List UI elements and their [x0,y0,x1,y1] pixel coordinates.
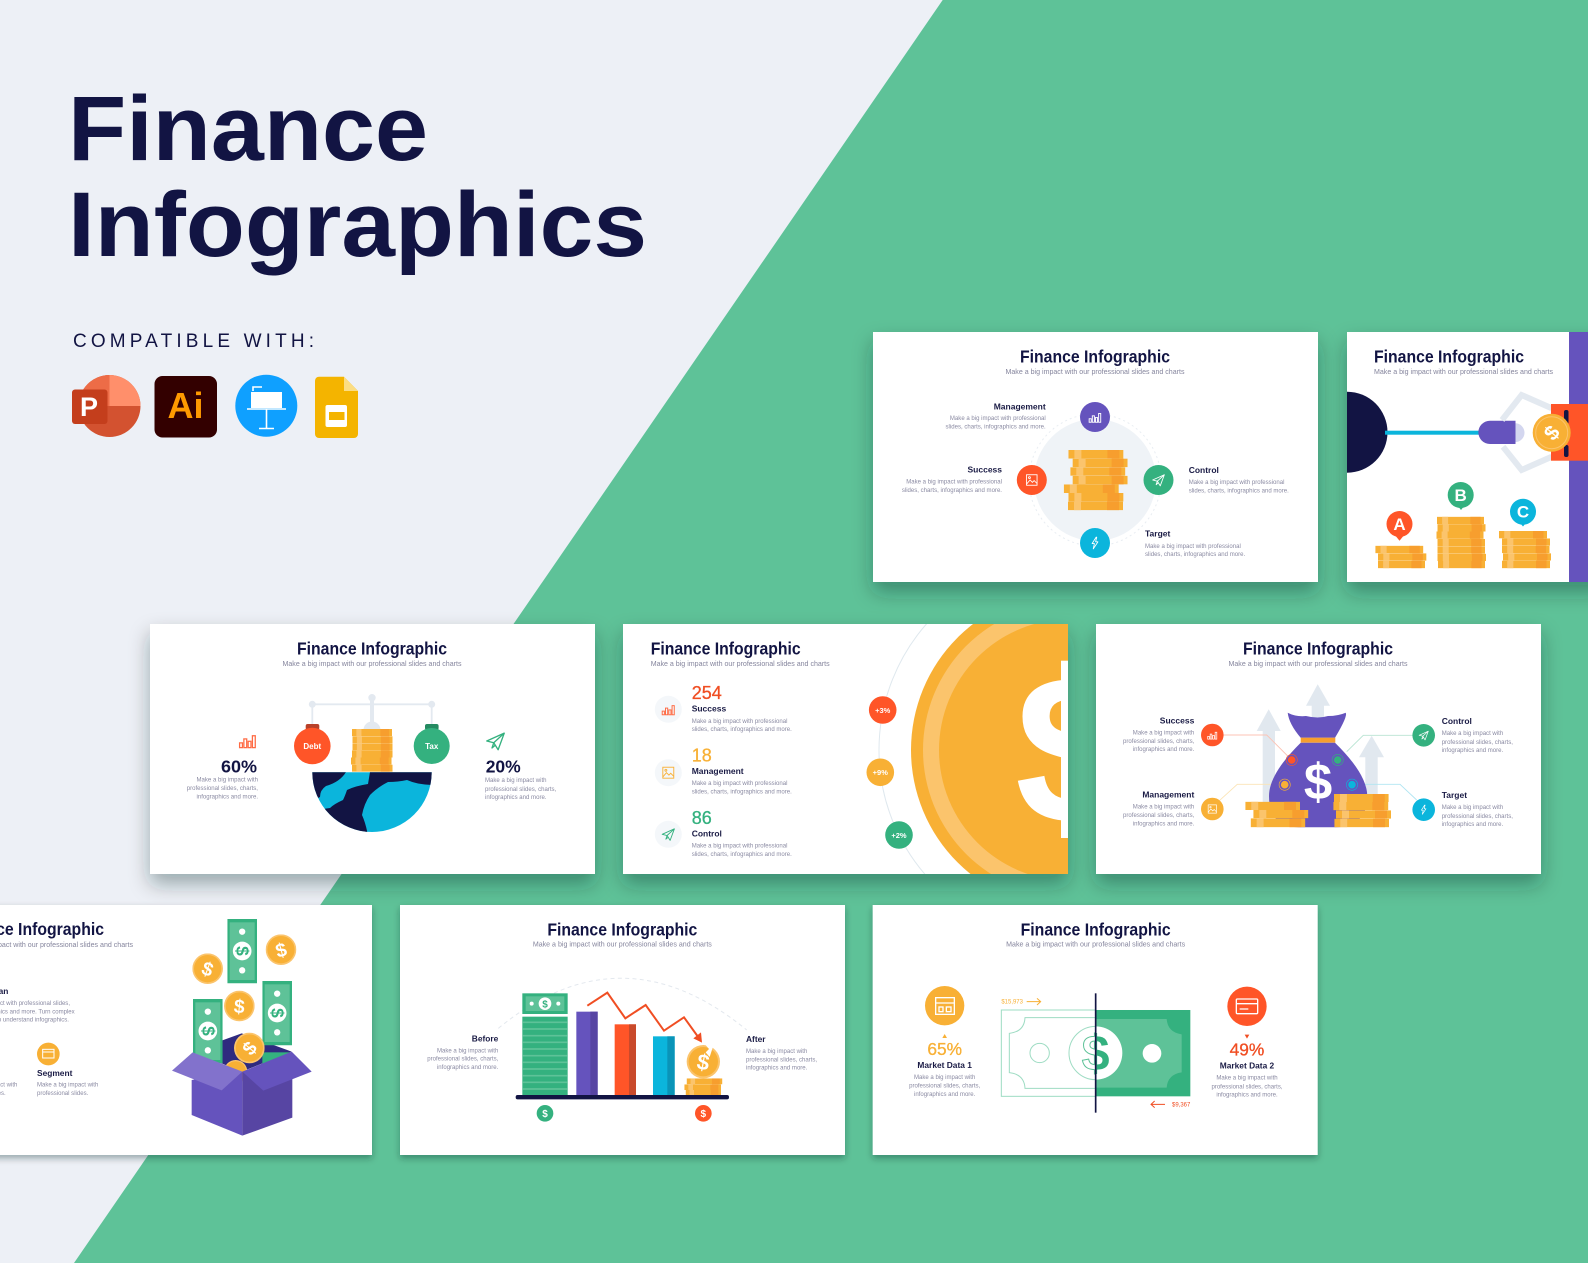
text: success: Make a big impact with [1133,730,1194,736]
icon row: compatible apps [72,375,358,438]
money bag: $ [1304,753,1332,810]
text: target: Target [1442,790,1467,800]
text: management: Make a big impact with [1133,804,1194,810]
text: target: slides, charts, infographics and more. [1145,552,1245,558]
marker: start [537,1105,553,1122]
value: $15,973: $15,973 [1001,1000,1024,1006]
text: 20 percent: 20% [486,757,521,777]
value: $9,367: $9,367 [1172,1102,1191,1108]
pin B [1448,482,1474,510]
text: control [1442,716,1513,754]
text: market data 1: professional slides, charts, [909,1084,981,1090]
icon: PowerPoint [72,375,140,437]
text: control: infographics and more. [1442,748,1504,754]
text: target: Make a big impact with [1442,805,1503,811]
icon: control [1144,465,1174,495]
connector lines [1212,735,1423,801]
badge: +3%: +3% [875,706,891,715]
stat: 18 management: 18 [692,746,712,766]
text: target: Target [1145,529,1171,539]
stat: 86 control: 86 [692,808,712,828]
text: after: professional slides, charts, [746,1057,817,1063]
marker: end [695,1105,712,1122]
icon: card [1227,987,1267,1026]
text: control: professional slides, charts, [1442,740,1513,746]
icon: Keynote [235,375,297,437]
globe half [310,772,435,836]
panel: slide with coin press and A B C stacks [1347,332,1588,582]
text: market data 2: Market Data 2 [1220,1061,1275,1071]
title [68,78,647,276]
heading: Finance Infographic [297,638,447,658]
text: market data 2: infographics and more. [1216,1093,1278,1099]
text: market data 2: professional slides, charts, [1211,1084,1283,1090]
central circle [1029,414,1161,546]
subheading: Make a big impact with our professional slides and charts [1374,367,1553,376]
text: success: infographics and more. [1133,747,1195,753]
text: 60 percent: professional slides, charts, [187,786,258,792]
money box illustration: $ [198,1026,218,1036]
marker: start: $ [542,1109,548,1120]
subheading: Make a big impact with our professional slides and charts [1006,367,1185,376]
text: management [946,401,1046,430]
trend arrow [587,993,702,1043]
heading: Finance Infographic [547,920,698,940]
subheading: Make a big impact with our professional slides and charts [533,940,712,949]
weight: tax [414,724,450,764]
machine illustration [1347,392,1588,473]
text: market data 2: 49% [1230,1040,1264,1060]
icon: success [1017,465,1047,495]
money box illustration: $ [233,997,246,1018]
text: segment: Make a big impact with [37,1083,98,1089]
stack C [1499,531,1551,568]
pin A: A [1393,515,1406,534]
text: control: Make a big impact with [1442,731,1503,737]
icon: bars [240,736,255,748]
coin stack [351,729,393,772]
weight: tax: Tax [425,742,439,751]
money box illustration: $ [268,1008,288,1018]
stat: 18 management: Make a big impact with professional [692,781,787,787]
text: before: infographics and more. [437,1065,499,1071]
text: success: Success [968,465,1002,475]
text: segment [37,1068,98,1097]
text: market data 1: Make a big impact with [914,1075,975,1081]
text: management [1123,789,1195,827]
title: Finance [68,78,428,180]
icon: plane [487,733,504,750]
coin stack [1064,450,1128,510]
text: before [427,1033,499,1071]
stat: 254 success [655,683,792,733]
icon: management [1201,798,1224,820]
text: 60 percent: 60% [221,756,257,776]
text: market data 1 [909,1034,981,1098]
money box illustration: $ [233,946,253,956]
bar: purple [576,1012,598,1095]
text: success: Success [1160,715,1195,725]
text: after: Make a big impact with [746,1049,807,1055]
text: management: Management [994,401,1046,411]
pin C: C [1517,503,1529,522]
text: 60 percent: Make a big impact with [196,778,258,784]
text: after: After [746,1034,766,1044]
banknote: $ [1082,1025,1110,1081]
scale beam [309,694,435,730]
text: market data 1: infographics and more. [914,1092,976,1098]
text: 20 percent: infographics and more. [485,795,547,801]
text: target: infographics and more. [1442,822,1504,828]
text: success [902,465,1002,494]
subheading: Make a big impact with our professional slides and charts [651,659,830,668]
icon: management [1080,402,1110,432]
bar: red [615,1024,636,1095]
text: management: professional slides, charts, [1123,813,1195,819]
stat: 86 control [655,808,792,858]
text: segment: Segment [37,1068,73,1078]
text: success: Make a big impact with professional [906,479,1002,485]
background arrows [1257,684,1384,802]
text: after: infographics and more. [746,1066,808,1072]
text: market data 2 [1211,1035,1283,1099]
text: management: infographics and more. [1133,821,1195,827]
pin B: B [1455,486,1467,505]
panel: slide with large coin and stats [612,622,1080,896]
text: 20 percent: Make a big impact with [485,778,547,784]
stat: 86 control: Control [692,828,722,838]
bill on top of stack: $ [542,999,548,1010]
bill on top of stack [522,993,568,1014]
purple side bar [1569,332,1588,582]
stack A [1375,546,1426,568]
pin A [1386,511,1412,541]
badge: +2% [885,821,913,849]
coin stack [684,1078,722,1095]
machine illustration: $ [1540,421,1565,445]
badge: +9%: +9% [873,768,888,777]
text: target: professional slides, charts, [1442,814,1513,820]
money box illustration [172,919,312,1136]
compatible with label: COMPATIBLE WITH: [73,331,314,352]
weight: debt: Debt [303,742,322,751]
heading: Finance Infographic [651,638,801,658]
value: $15,973 [1001,998,1041,1006]
icon: segment [37,1043,60,1065]
heading: Finance Infographic [1020,347,1170,367]
text: market data 2: Make a big impact with [1216,1076,1278,1082]
panel: slide with split banknote [873,905,1318,1155]
icon: store [925,986,964,1025]
stack B [1436,517,1486,568]
text: before: professional slides, charts, [427,1057,499,1063]
badge: +9% [866,758,894,786]
text: plan [0,986,75,1024]
weight: debt [294,724,331,764]
text: success [1123,715,1195,753]
text: success: professional slides, charts, [1123,739,1195,745]
heading: Finance Infographic [1021,920,1171,940]
text: target: Make a big impact with professional [1145,544,1241,550]
stat: 18 management [655,746,792,795]
badge: +2%: +2% [891,831,907,840]
text: control: Control [1442,716,1472,726]
money box illustration: $ [239,1038,262,1060]
stat: 18 management: Management [692,766,744,776]
text: market data 1: Market Data 1 [917,1060,972,1070]
text: control: Control [1189,465,1219,475]
text: success: slides, charts, infographics and more. [902,488,1002,494]
heading: Finance Infographic [1374,347,1524,367]
money box illustration: $ [273,940,290,963]
stat: 254 success: Make a big impact with professional [692,719,787,725]
large coin: $ [1015,631,1133,868]
text: segment: professional slides. [37,1091,89,1097]
stat: 86 control: slides, charts, infographics and more. [692,852,792,858]
stat: 18 management: slides, charts, infographics and more. [692,789,792,795]
text: control: slides, charts, infographics and more. [1189,488,1289,494]
text: control [1189,465,1289,494]
text: management: Management [1142,789,1194,799]
money bag [1269,713,1367,827]
text: before: Before [472,1033,499,1043]
text: 60 percent [187,756,258,801]
broken coin [687,1044,720,1078]
text: target [1145,529,1245,558]
subheading: Make a big impact with our professional slides and charts [1228,659,1408,668]
green stack [522,1017,568,1095]
icon: Illustrator [154,376,217,438]
subheading: Make a big impact with our professional slides and charts [282,659,462,668]
icon: Google Slides [315,377,358,438]
subheading: Make a big impact with our professional slides and charts [1006,940,1186,949]
panel: slide with money box (cropped left) [0,905,372,1155]
value: $9,367 [1151,1101,1191,1108]
icon: success [1201,724,1224,746]
chart baseline [516,1095,729,1099]
panel: slide with balance scale and globe [150,624,595,874]
icon: Illustrator: Ai [168,385,204,426]
large coin [878,624,1068,874]
text: control: Make a big impact with professional [1189,480,1284,486]
banknote: $ [1082,1025,1110,1081]
title: Infographics [68,174,647,276]
icon: target [1412,798,1435,821]
text: management: Make a big impact with professional [950,416,1046,422]
heading: Finance Infographic [1243,638,1393,658]
icon: target [1080,528,1110,558]
stat: 254 success: 254 [692,683,722,703]
text: 20 percent [485,757,557,801]
stat: 254 success: Success [692,704,726,714]
panel: slide with falling bar chart [400,905,845,1155]
stat: 86 control: Make a big impact with professional [692,844,787,850]
pin C [1510,499,1536,526]
text: management: slides, charts, infographics and more. [946,424,1046,430]
text: 60 percent: infographics and more. [196,795,258,801]
panel: slide with money bag [1096,624,1541,874]
stat: 254 success: slides, charts, infographics and more. [692,727,792,733]
broken coin: $ [695,1049,711,1076]
badge: +3% [869,696,896,724]
marker: end: $ [701,1109,707,1120]
icon: control [1412,724,1435,747]
coin stacks [1245,794,1391,827]
text: market data 1: 65% [927,1039,962,1059]
bar: cyan [653,1036,675,1095]
text: before: Make a big impact with [437,1048,498,1054]
text: cropped column [0,1083,17,1097]
money box illustration: $ [199,958,216,982]
panel: slide with circular coin diagram [873,332,1318,582]
dashed arc [498,978,747,1030]
text: after [746,1034,817,1072]
text: 20 percent: professional slides, charts, [485,787,557,793]
banknote [1001,993,1190,1113]
icon: PowerPoint: P [80,392,98,422]
text: target [1442,790,1513,828]
